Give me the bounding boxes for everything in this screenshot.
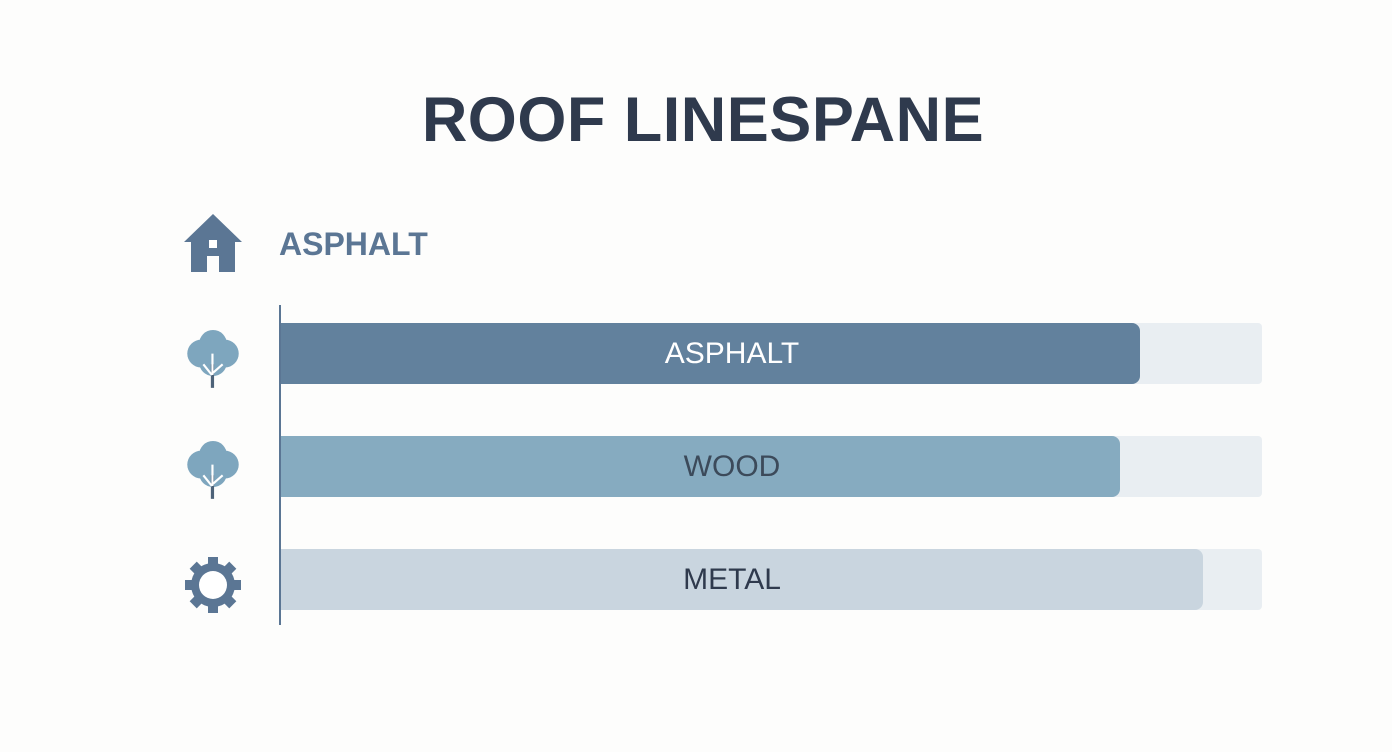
bar: asphalt: ASPHALT xyxy=(665,337,799,370)
icon: tree 1 xyxy=(187,330,239,388)
icon: gear xyxy=(185,557,241,613)
axis line xyxy=(279,305,281,625)
bar: wood xyxy=(281,436,1262,497)
bar: metal: METAL xyxy=(683,563,781,596)
icon: tree 2 xyxy=(187,441,239,499)
legend label: ASPHALT xyxy=(279,226,428,262)
bar: asphalt xyxy=(281,323,1262,384)
icon: house xyxy=(184,214,242,272)
title: ROOF LINESPANE xyxy=(422,85,984,155)
bar: metal xyxy=(281,549,1262,610)
bar: wood: WOOD xyxy=(684,450,780,483)
